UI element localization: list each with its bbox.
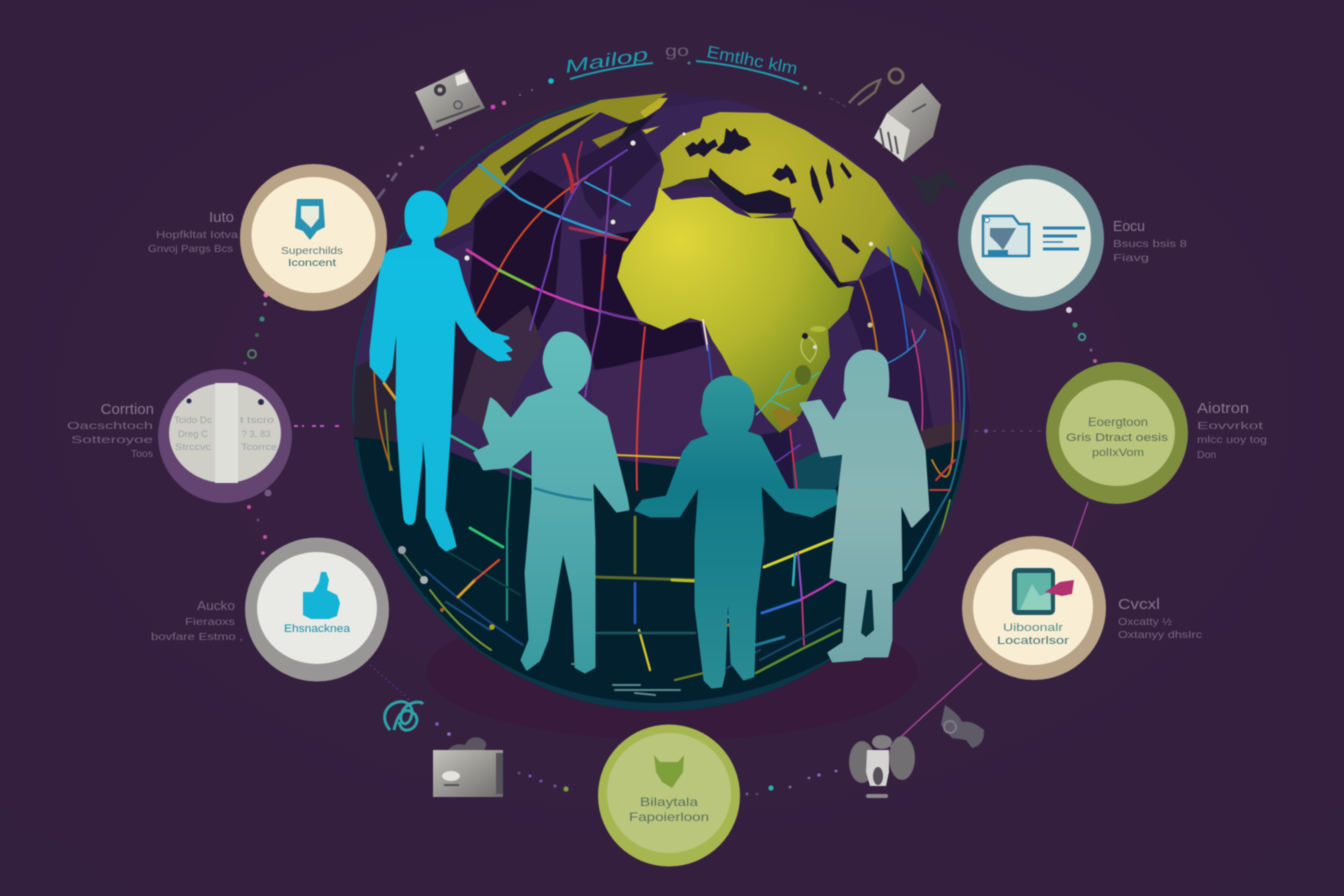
- title: Mailop: [563, 44, 650, 77]
- circle: green bottom: [598, 724, 740, 866]
- side text: lower left: bovfare Estmo ,: [151, 631, 243, 643]
- side text: lower right: Oxcatty ½: [1118, 616, 1172, 628]
- side text: top left: Gnvoj Pargs Bcs: [148, 243, 233, 255]
- bottom chain: [370, 665, 410, 700]
- left chain: [264, 292, 268, 298]
- icon: thumb up: [303, 572, 340, 619]
- side text: right: Aiotron: [1197, 400, 1249, 417]
- side text: lower right: Cvcxl: [1118, 596, 1160, 613]
- person: pale teal right: [801, 351, 928, 661]
- person: teal child left: [475, 333, 628, 672]
- side text: top right: Bsucs bsis 8: [1113, 238, 1187, 250]
- continent: africa: [617, 187, 854, 433]
- icon: dark leaf arrow: [907, 170, 975, 204]
- icon: blue shield: [295, 199, 325, 240]
- right chain: [1066, 307, 1072, 313]
- side text: top left: Iuto: [209, 209, 234, 226]
- icon: tablet with tag: [1012, 568, 1055, 615]
- side text: lower left: [151, 598, 243, 643]
- continent: americas band: [438, 93, 667, 238]
- side text: top right: Eocu: [1113, 218, 1145, 235]
- africa southern detail: [756, 326, 826, 431]
- circle: green right: polIxVom: [1092, 447, 1144, 459]
- circle: cream top left: Iconcent: [288, 257, 336, 269]
- icon: green mask: [654, 755, 684, 788]
- continent: coast dark seas: [667, 128, 945, 330]
- side text: top left: Hopfkltat Iotva: [156, 229, 238, 241]
- globe: [352, 92, 970, 712]
- circle: purple left: Dreg C: [178, 429, 208, 440]
- person: presenter bright cyan: [371, 192, 511, 550]
- circle: green right: Gris Dtract oesis: [1066, 432, 1169, 444]
- circle: green right: Eoergtoon: [1088, 415, 1148, 429]
- side text: left: Toos: [131, 448, 153, 460]
- side text: lower left: Fieraoxs: [185, 616, 235, 628]
- title: go: [665, 43, 689, 60]
- circle: grey lower left: [245, 538, 389, 682]
- side text: lower left: Aucko: [197, 598, 235, 613]
- side text: left: [67, 401, 154, 460]
- circle: cream top left: [240, 164, 387, 311]
- title: [563, 42, 799, 84]
- side text: right: Eovvrkot: [1197, 420, 1263, 432]
- icon: grey camera: [415, 69, 485, 130]
- ground shadow: [426, 604, 918, 740]
- circle: green bottom: Fapoierloon: [629, 810, 709, 824]
- circle: purple left: t tscro: [240, 415, 274, 426]
- circle: green right: [1046, 362, 1188, 504]
- globe ocean patches: [352, 130, 969, 490]
- circle: purple left: ? 3, 83: [241, 429, 271, 440]
- circle label columns: Tcido Dc: [174, 415, 212, 426]
- side text: top right: [1113, 218, 1187, 264]
- circle: purple left: [158, 369, 292, 503]
- side text: top right: Fiavg: [1113, 252, 1149, 264]
- circle: cream lower right: Uiboonalr: [1003, 622, 1063, 634]
- circle: purple left: Strccvc: [175, 442, 211, 453]
- circle: slate top right: [958, 165, 1104, 311]
- icon: grey box and hook: [849, 69, 941, 162]
- side text: right: Don: [1197, 449, 1216, 461]
- continent: eurasia: [659, 112, 925, 297]
- icon: grey koala: [849, 735, 915, 798]
- person leg gap: [861, 590, 874, 637]
- circle label: Superchilds: [281, 245, 343, 257]
- side text: lower right: [1118, 596, 1202, 641]
- person: dark teal centre: [636, 377, 837, 687]
- icon: grey briefcase: [433, 737, 503, 797]
- side text: top left: [148, 209, 238, 255]
- circle: purple left: Tcorrce: [241, 442, 277, 453]
- circle: grey lower left: Ehsnacknea: [284, 623, 351, 635]
- icon: monitor with text lines: [983, 216, 1029, 256]
- connector dots and lines: [244, 78, 1097, 795]
- side text: left: Sotteroyoe: [71, 434, 153, 446]
- circle: cream lower right: [962, 536, 1106, 680]
- icon: teal spiral: [385, 702, 423, 730]
- side text: right: mlcc uoy tog: [1197, 434, 1267, 446]
- side text: lower right: Oxtanyy dhsIrc: [1118, 629, 1202, 641]
- circle: cream lower right: Locatorlsor: [997, 635, 1069, 647]
- icon: dark grey headphone: [941, 705, 984, 748]
- globe lower dark hemisphere: [354, 436, 968, 704]
- person waist band: [534, 488, 592, 500]
- side text: right: [1197, 400, 1267, 461]
- side text: left: Corrtion: [101, 401, 154, 418]
- globe grid lines: [374, 142, 964, 695]
- side text: left: Oacschtoch: [67, 420, 153, 432]
- title: Emtlhc klm: [705, 42, 799, 78]
- circle: green bottom: Bilaytala: [640, 795, 698, 809]
